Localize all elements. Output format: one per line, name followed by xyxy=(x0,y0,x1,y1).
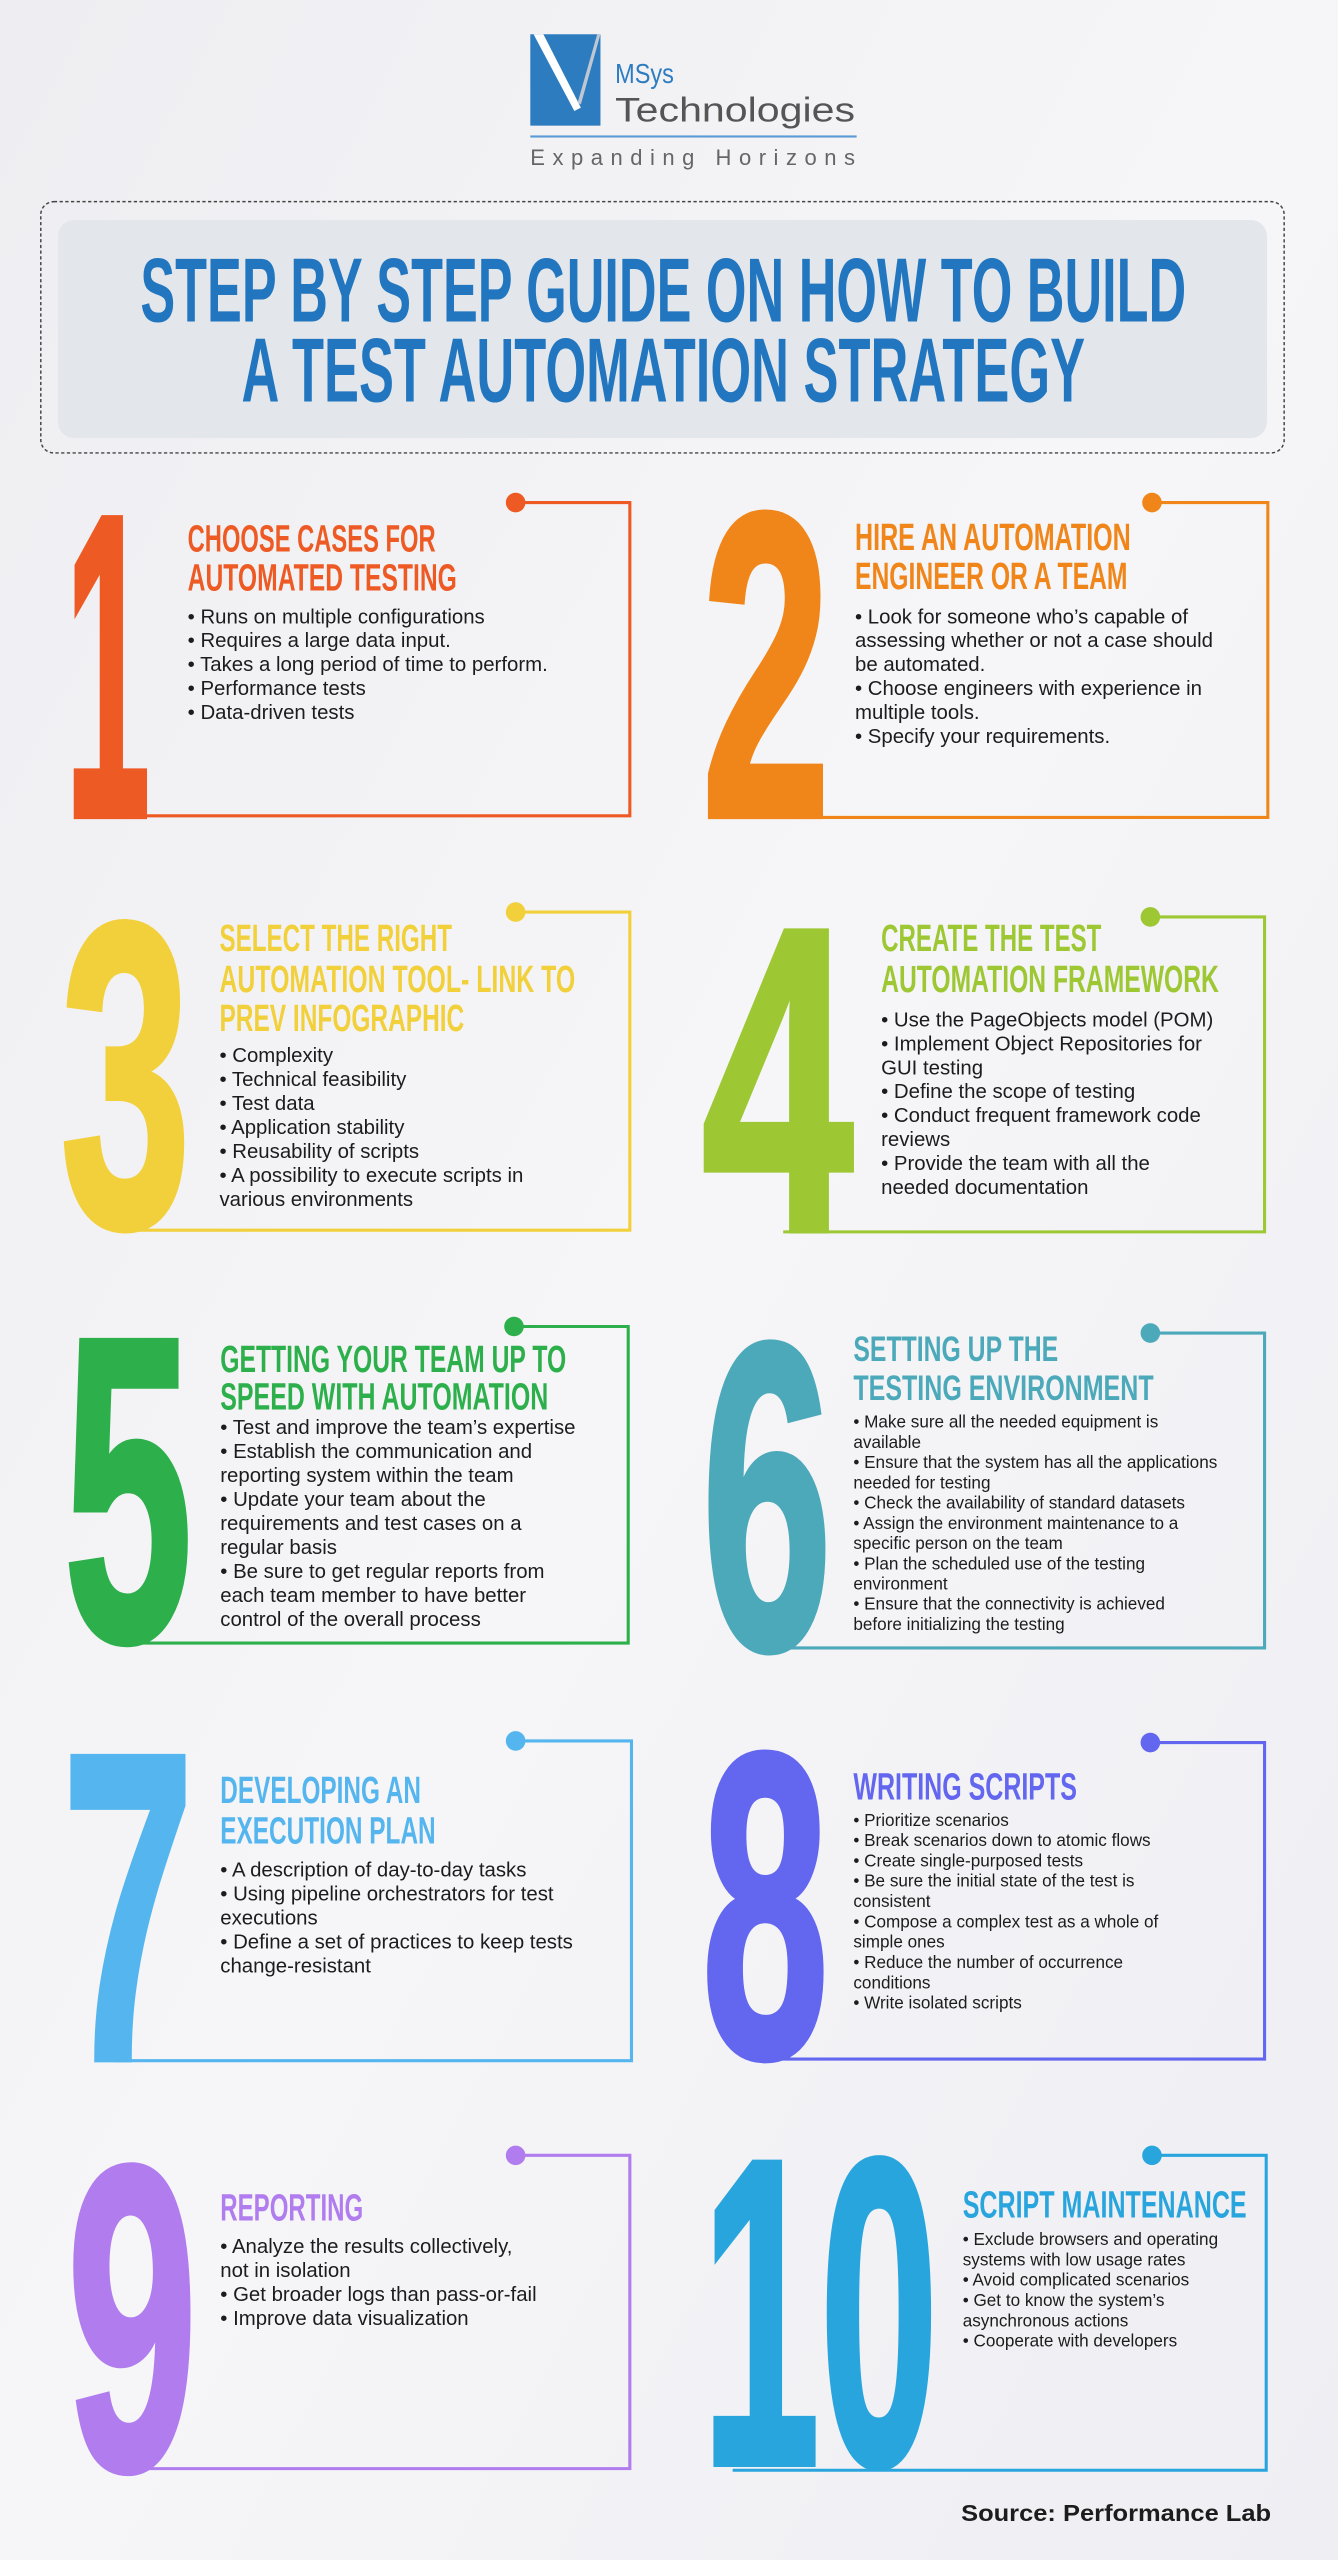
bullets 3: • Technical feasibility xyxy=(219,1069,407,1091)
bullets 6: • Ensure that the system has all the applications xyxy=(853,1452,1217,1472)
bullets 10: • Avoid complicated scenarios xyxy=(963,2270,1189,2290)
bullets 3: various environments xyxy=(219,1189,413,1211)
logo text: MSys xyxy=(615,58,674,89)
bullets 4: • Implement Object Repositories for xyxy=(881,1033,1202,1055)
panel 6: testing environment xyxy=(702,1252,1265,1741)
bullets 8: • Compose a complex test as a whole of xyxy=(853,1911,1159,1931)
bullets 8: • Be sure the initial state of the test is xyxy=(853,1871,1134,1891)
bullets 10: • Exclude browsers and operating xyxy=(963,2229,1218,2249)
bullets 6: • Plan the scheduled use of the testing xyxy=(853,1553,1145,1573)
number 5: 5 xyxy=(64,1247,193,1732)
bullets 2: • Choose engineers with experience in xyxy=(855,678,1202,700)
number 6: 6 xyxy=(702,1252,832,1741)
bullets 8: • Write isolated scripts xyxy=(853,1993,1022,2013)
bullets 2: • Look for someone who’s capable of xyxy=(855,606,1188,628)
bullets 6: • Ensure that the connectivity is achieved xyxy=(853,1594,1165,1614)
tagline: Expanding Horizons xyxy=(530,145,855,170)
heading 4: CREATE THE TEST xyxy=(881,917,1101,959)
bullets 3: • Reusability of scripts xyxy=(219,1141,419,1163)
bullets 5: • Be sure to get regular reports from xyxy=(220,1561,545,1583)
heading 3: AUTOMATION TOOL- LINK TO xyxy=(219,958,575,1000)
heading 8: WRITING SCRIPTS xyxy=(853,1766,1077,1808)
bullets 5: each team member to have better xyxy=(220,1585,526,1607)
heading 5: SPEED WITH AUTOMATION xyxy=(220,1376,548,1418)
bullets 4: GUI testing xyxy=(881,1057,983,1079)
bullets 7: • Define a set of practices to keep tests xyxy=(220,1931,573,1953)
heading 6: SETTING UP THE xyxy=(853,1330,1058,1369)
bullets 4: • Conduct frequent framework code xyxy=(881,1105,1201,1127)
panel 8: writing scripts xyxy=(702,1663,1265,2148)
bullets 3: • Test data xyxy=(219,1093,315,1115)
number 8: 8 xyxy=(702,1663,829,2148)
source footer: Source: Performance Lab xyxy=(961,2500,1271,2526)
bullets 10: systems with low usage rates xyxy=(963,2249,1185,2269)
panel 2: hire engineer xyxy=(702,423,1268,908)
bullets 5: regular basis xyxy=(220,1537,337,1559)
heading 7: DEVELOPING AN xyxy=(220,1769,421,1811)
heading 6: TESTING ENVIRONMENT xyxy=(853,1369,1154,1408)
logo: MSys Technologies xyxy=(530,34,857,170)
bullets 8: • Reduce the number of occurrence xyxy=(853,1952,1123,1972)
panel 1: choose cases xyxy=(65,425,630,908)
bullets 8: • Break scenarios down to atomic flows xyxy=(853,1830,1151,1850)
bullets 7: executions xyxy=(220,1907,318,1929)
bullets 7: • Using pipeline orchestrators for test xyxy=(220,1883,554,1905)
bullets 8: • Prioritize scenarios xyxy=(853,1810,1009,1830)
heading 3: SELECT THE RIGHT xyxy=(219,917,452,959)
bullets 6: before initializing the testing xyxy=(853,1614,1065,1634)
bullets 3: • A possibility to execute scripts in xyxy=(219,1165,523,1187)
bullets 1: • Data-driven tests xyxy=(188,702,354,724)
heading 5: GETTING YOUR TEAM UP TO xyxy=(220,1338,566,1380)
panel 10: script maintenance: 10 xyxy=(702,2068,938,2557)
bullets 8: conditions xyxy=(853,1972,931,1992)
bullets 5: • Update your team about the xyxy=(220,1489,486,1511)
bullets 8: simple ones xyxy=(853,1932,945,1952)
heading 1: AUTOMATED TESTING xyxy=(188,557,457,599)
number 4: 4 xyxy=(702,837,855,1322)
bullets 5: • Test and improve the team’s expertise xyxy=(220,1417,575,1439)
bullets 3: • Complexity xyxy=(219,1045,334,1067)
bullets 6: environment xyxy=(853,1574,948,1594)
panel 1: choose cases: 1 xyxy=(65,425,150,908)
bullets 2: multiple tools. xyxy=(855,702,980,724)
bullets 9: • Improve data visualization xyxy=(220,2308,469,2330)
number 3: 3 xyxy=(60,832,191,1317)
bullets 7: • A description of day-to-day tasks xyxy=(220,1859,526,1881)
bullets 6: needed for testing xyxy=(853,1472,990,1492)
number 2: 2 xyxy=(702,423,831,908)
bullets 1: • Performance tests xyxy=(188,678,366,700)
panel 4: framework xyxy=(702,837,1265,1322)
bullets 8: • Create single-purposed tests xyxy=(853,1850,1083,1870)
bullets 10: asynchronous actions xyxy=(963,2310,1128,2330)
bullets 2: assessing whether or not a case should xyxy=(855,630,1213,652)
bullets 6: • Check the availability of standard datasets xyxy=(853,1493,1185,1513)
panel 3: select tool xyxy=(60,832,630,1317)
heading 2: HIRE AN AUTOMATION xyxy=(855,516,1131,558)
bullets 1: • Runs on multiple configurations xyxy=(188,606,485,628)
bullets 6: specific person on the team xyxy=(853,1533,1063,1553)
bullets 6: • Assign the environment maintenance to a xyxy=(853,1513,1179,1533)
bullets 1: • Requires a large data input. xyxy=(188,630,451,652)
heading 3: PREV INFOGRAPHIC xyxy=(219,997,464,1039)
bullets 4: needed documentation xyxy=(881,1177,1088,1199)
title panel xyxy=(41,202,1284,453)
bullets 7: change-resistant xyxy=(220,1955,371,1977)
bullets 10: • Cooperate with developers xyxy=(963,2331,1177,2351)
bullets 3: • Application stability xyxy=(219,1117,405,1139)
bullets 10: • Get to know the system’s xyxy=(963,2290,1164,2310)
bullets 4: • Use the PageObjects model (POM) xyxy=(881,1009,1213,1031)
heading 2: ENGINEER OR A TEAM xyxy=(855,555,1128,597)
bullets 5: • Establish the communication and xyxy=(220,1441,532,1463)
bullets 1: • Takes a long period of time to perform. xyxy=(188,654,548,676)
panel 9: reporting xyxy=(67,2076,630,2560)
bullets 9: not in isolation xyxy=(220,2260,351,2282)
bullets 2: be automated. xyxy=(855,654,985,676)
bullets 5: requirements and test cases on a xyxy=(220,1513,522,1535)
bullets 6: available xyxy=(853,1432,921,1452)
logo: MSys Technologies: Technologies xyxy=(615,92,855,130)
bullets 4: • Define the scope of testing xyxy=(881,1081,1135,1103)
bullets 4: reviews xyxy=(881,1129,950,1151)
bullets 8: consistent xyxy=(853,1891,931,1911)
bullets 5: reporting system within the team xyxy=(220,1465,514,1487)
heading 1: CHOOSE CASES FOR xyxy=(188,517,436,559)
bullets 2: • Specify your requirements. xyxy=(855,726,1110,748)
bullets 9: • Get broader logs than pass-or-fail xyxy=(220,2284,537,2306)
heading 9: REPORTING xyxy=(220,2187,363,2229)
bullets 9: • Analyze the results collectively, xyxy=(220,2236,512,2258)
panel 5: team up to speed xyxy=(64,1247,628,1732)
bullets 5: control of the overall process xyxy=(220,1609,481,1631)
number 7: 7 xyxy=(62,1663,194,2153)
heading 7: EXECUTION PLAN xyxy=(220,1810,436,1852)
bullets 6: • Make sure all the needed equipment is xyxy=(853,1412,1158,1432)
icon: logo mark xyxy=(530,34,600,126)
bullets 4: • Provide the team with all the xyxy=(881,1153,1150,1175)
number 9: 9 xyxy=(67,2076,197,2560)
panel 7: execution plan xyxy=(62,1663,631,2153)
